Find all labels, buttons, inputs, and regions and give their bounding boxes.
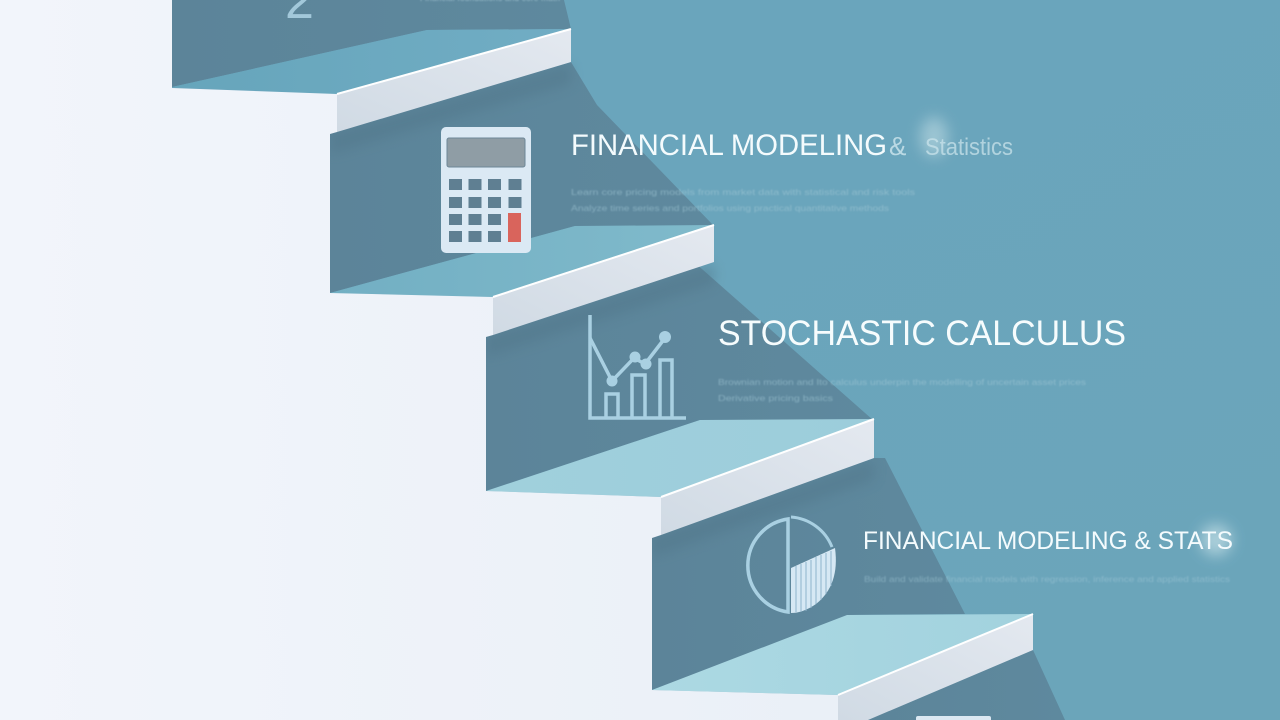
step 2 riser shadow (330, 64, 571, 154)
heading ghost ampersand: & (889, 131, 906, 161)
step 4 riser shadow (652, 460, 874, 557)
glow (1200, 524, 1232, 556)
body text: Build and validate financial models with regression, inference and applied statistics (864, 574, 1230, 584)
step 2 riser (330, 62, 714, 293)
body text (571, 187, 915, 213)
glow (920, 117, 948, 157)
step 1 riser (172, 0, 571, 87)
step 3 tread (486, 419, 874, 497)
body text: Analyze time series and portfolios using practical quantitative methods (571, 203, 889, 213)
icon: calculator (441, 127, 531, 253)
heading block: financial modeling 1 (571, 117, 1013, 213)
step 4 tread (652, 614, 1033, 695)
step 5 (838, 650, 1065, 720)
step 2 front (493, 225, 714, 335)
step 1 tread (172, 29, 571, 94)
step 4 riser (652, 458, 965, 690)
step 4 front (838, 614, 1033, 720)
step 3 riser shadow (486, 264, 714, 357)
step 1 (172, 0, 571, 94)
step front faces (337, 29, 1033, 720)
body text: Derivative pricing basics (718, 393, 833, 403)
step 3 (486, 262, 874, 497)
icon: pie chart (748, 517, 836, 613)
body text: Brownian motion and Ito calculus underpin the modelling of uncertain asset prices (718, 377, 1086, 387)
body text: Learn core pricing models from market data with statistical and risk tools (571, 187, 915, 197)
heading: FINANCIAL MODELING (571, 129, 887, 162)
step 3 riser (486, 262, 873, 491)
step 2 (330, 62, 714, 297)
step 3 front (661, 419, 874, 535)
heading block: stochastic calculus (718, 314, 1126, 403)
heading: STOCHASTIC CALCULUS (718, 314, 1126, 353)
step 2 tread (330, 225, 714, 297)
step 4 (652, 458, 1033, 695)
step 5 icon top (916, 716, 991, 720)
body text (718, 377, 1086, 403)
step 5 riser (838, 650, 1065, 720)
staircase wall (0, 0, 838, 720)
heading ghost text: Statistics (925, 134, 1013, 161)
heading block: financial modeling and stats (863, 524, 1233, 584)
heading: FINANCIAL MODELING & STATS (863, 527, 1233, 555)
icon: bar and line chart (590, 315, 686, 418)
step 1 front (337, 29, 571, 132)
